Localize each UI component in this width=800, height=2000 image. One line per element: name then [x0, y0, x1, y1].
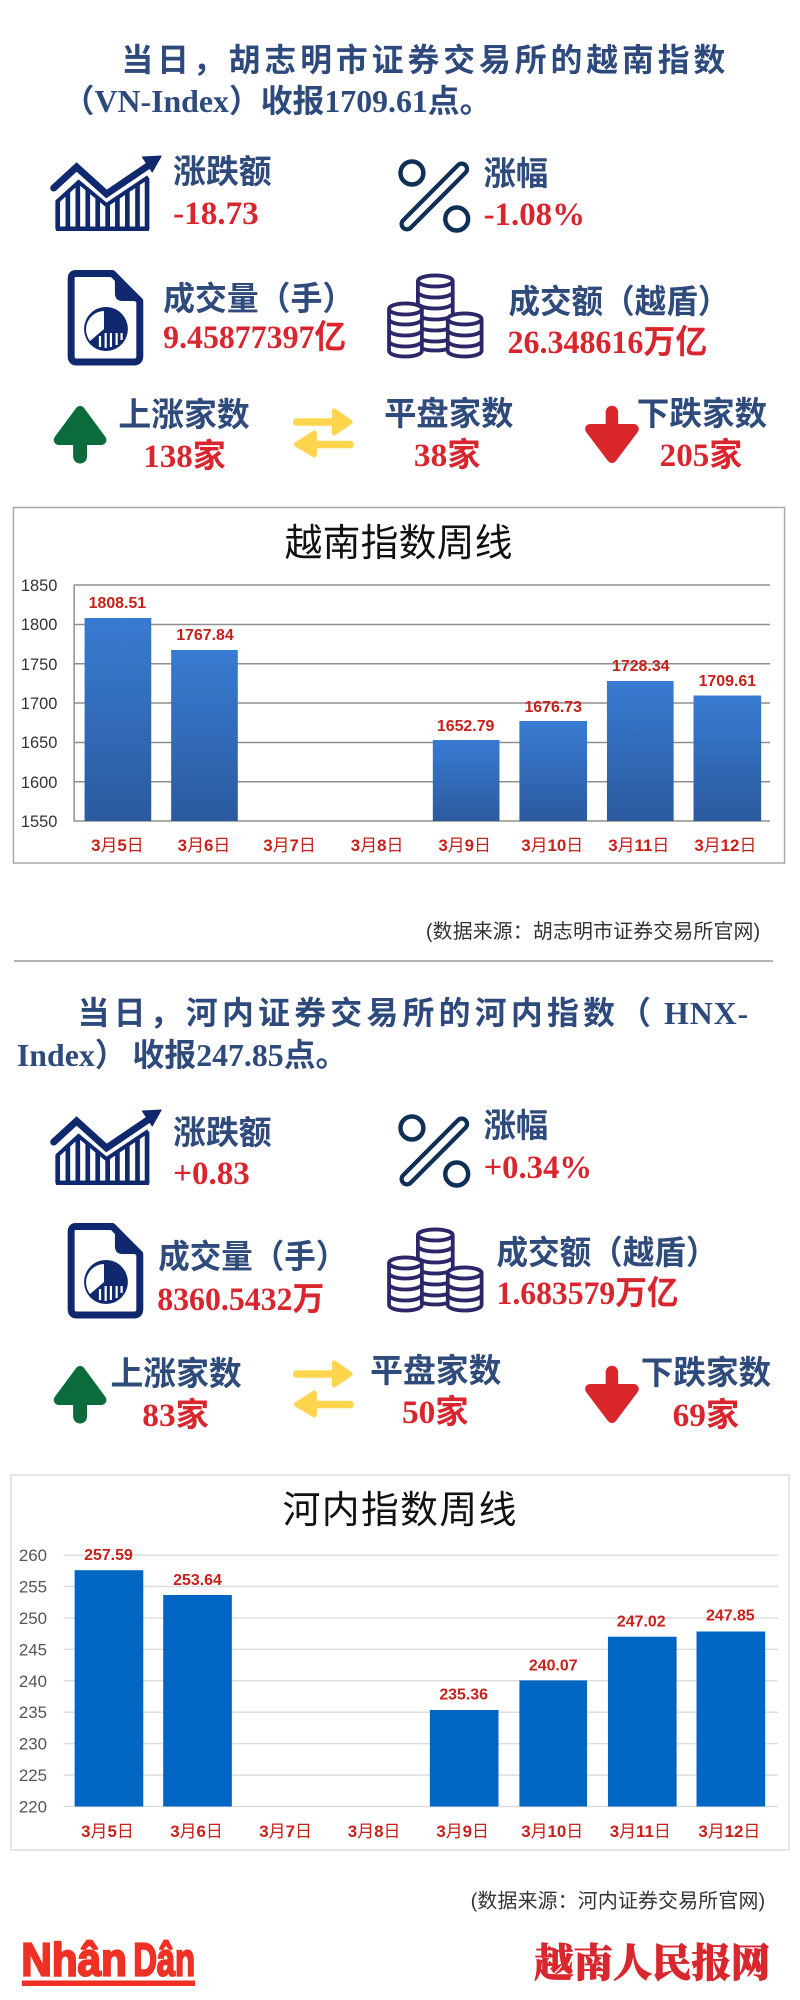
section 2: HNX-Index summary [17, 996, 771, 1434]
y axis labels: 1750 [21, 656, 57, 674]
stat: change percent [484, 1107, 592, 1186]
icon: red down arrow [590, 412, 634, 458]
stat: volume: 9.45877397亿 [163, 319, 346, 356]
stat: turnover: 成交额（越盾） [508, 283, 729, 320]
title: VN-Index close: 当日，胡志明市证券交易所的越南指数 [121, 43, 725, 78]
y axis labels: 255 [19, 1577, 47, 1597]
x axis date labels: 3月9日 [438, 836, 491, 855]
stat: advancers: 上涨家数 [110, 1355, 242, 1392]
y axis labels: 1850 [21, 577, 57, 595]
icon: coin stacks [389, 1230, 482, 1310]
x axis date labels: 3月5日 [91, 836, 144, 855]
bar value labels: 1808.51 [89, 595, 146, 612]
stat: volume [163, 280, 354, 356]
icon: green up arrow [59, 1371, 101, 1416]
x axis date labels: 3月6日 [170, 1822, 223, 1841]
stat: turnover: 1.683579万亿 [497, 1275, 679, 1312]
stat: turnover: 26.348616万亿 [507, 324, 707, 361]
source note 2: (数据来源：河内证券交易所官网) [471, 1889, 765, 1913]
y axis labels: 260 [19, 1546, 47, 1565]
icon: green up arrow [59, 411, 101, 456]
bar value labels: 247.85 [706, 1607, 755, 1624]
y axis labels: 1650 [21, 734, 57, 752]
y axis labels: 1550 [21, 813, 57, 831]
bar value labels: 235.36 [439, 1687, 488, 1704]
icon: percent [400, 162, 468, 230]
x axis date labels: 3月12日 [698, 1822, 760, 1841]
section 1: VN-Index summary [54, 43, 767, 475]
stat: decliners [641, 1354, 771, 1434]
y axis labels: 245 [19, 1640, 47, 1659]
stat: decliners: 205家 [660, 437, 742, 474]
logo: Nhan Dan [21, 1933, 195, 1986]
y axis labels: 235 [19, 1703, 47, 1722]
y axis labels: 1800 [21, 616, 57, 634]
stat: unchanged: 50家 [402, 1394, 469, 1431]
icon: percent [400, 1116, 468, 1186]
icon: yellow flat arrows [297, 411, 350, 455]
x axis date labels: 3月10日 [521, 836, 583, 855]
stat: change percent: 涨幅 [484, 155, 548, 192]
stat: change amount: 涨跌额 [173, 153, 272, 190]
stat: decliners: 下跌家数 [637, 395, 767, 432]
stat: advancers: 上涨家数 [118, 396, 250, 433]
stat: change amount [173, 1114, 272, 1192]
y axis labels: 250 [19, 1609, 47, 1628]
bar value labels: 257.59 [84, 1547, 133, 1564]
stat: change percent [484, 155, 585, 233]
stat: advancers: 138家 [143, 438, 226, 475]
y axis labels [21, 577, 57, 831]
bar value labels: 1728.34 [612, 658, 670, 675]
stat: volume: 成交量（手） [158, 1238, 347, 1275]
stat: change percent: -1.08% [484, 197, 585, 233]
x axis date labels [81, 1822, 760, 1841]
stat: advancers [118, 396, 250, 475]
x axis date labels: 3月8日 [351, 836, 403, 855]
stat: unchanged: 38家 [414, 437, 481, 474]
stat: unchanged [384, 395, 513, 474]
stat: decliners: 69家 [673, 1397, 739, 1434]
stat: advancers: 83家 [142, 1397, 209, 1434]
y axis labels: 230 [19, 1735, 47, 1754]
x axis date labels: 3月11日 [608, 836, 669, 855]
stat: change amount [173, 153, 272, 232]
bar value labels [89, 595, 756, 735]
y axis labels: 225 [19, 1766, 47, 1785]
icon: red down arrow [590, 1372, 634, 1418]
bar value labels: 1709.61 [699, 673, 756, 690]
stat: volume: 8360.5432万 [157, 1282, 324, 1318]
title: HNX-Index close: 当日，河内证券交易所的河内指数（ HNX- [78, 996, 749, 1031]
stat: advancers [110, 1355, 242, 1434]
icon: document with pie chart [71, 271, 143, 362]
icon: yellow flat arrows [297, 1363, 350, 1415]
panel: HNX-Index weekly chart [11, 1475, 789, 1850]
logo: Nhan Dan: Dân [133, 1933, 195, 1986]
stat: decliners [637, 395, 767, 474]
bar value labels: 253.64 [173, 1572, 222, 1589]
source note 1: (数据来源：胡志明市证券交易所官网) [426, 920, 760, 943]
bar value labels [84, 1547, 755, 1704]
y axis labels: 220 [19, 1797, 47, 1817]
stat: change amount: 涨跌额 [173, 1114, 272, 1151]
stat: change amount: +0.83 [173, 1156, 250, 1192]
stat: volume: 成交量（手） [163, 280, 354, 317]
brand name in Chinese: 越南人民报网 [534, 1933, 770, 1989]
y axis labels: 1700 [21, 695, 57, 713]
chart title: 河内指数周线 [283, 1490, 516, 1532]
icon: trend chart [54, 1110, 161, 1185]
stat: turnover: 成交额（越盾） [497, 1234, 717, 1271]
stat: turnover [497, 1234, 717, 1312]
x axis date labels: 3月6日 [178, 836, 230, 855]
logo: Nhan Dan: Nhân [21, 1933, 127, 1986]
x axis date labels: 3月11日 [610, 1822, 671, 1841]
title: HNX-Index close: Index）收报247.85点。 [17, 1038, 347, 1073]
stat: volume [157, 1238, 347, 1318]
chart title: 越南指数周线 [285, 523, 512, 565]
title: VN-Index close: （VN-Index）收报1709.61点。 [63, 84, 491, 119]
x axis date labels: 3月9日 [436, 1822, 489, 1841]
x axis date labels: 3月7日 [259, 1822, 312, 1841]
stat: decliners: 下跌家数 [641, 1354, 771, 1391]
stat: unchanged: 平盘家数 [370, 1352, 502, 1389]
stat: change percent: +0.34% [484, 1150, 592, 1186]
panel: VN-Index weekly chart [13, 508, 785, 863]
x axis date labels: 3月10日 [521, 1822, 583, 1841]
stat: unchanged [370, 1352, 502, 1431]
bar value labels: 1767.84 [176, 627, 234, 644]
icon: document with pie chart [71, 1224, 143, 1315]
y axis labels [19, 1546, 47, 1817]
icon: trend chart [54, 156, 161, 231]
bar value labels: 1652.79 [437, 718, 495, 735]
stat: turnover [507, 283, 729, 361]
y axis labels: 240 [19, 1672, 47, 1691]
y axis labels: 1600 [21, 774, 57, 792]
stat: change percent: 涨幅 [484, 1107, 548, 1144]
title: HNX-Index close [17, 996, 749, 1073]
bars [85, 618, 761, 821]
x axis date labels: 3月7日 [263, 836, 316, 855]
x axis date labels: 3月5日 [81, 1822, 134, 1841]
x axis date labels: 3月8日 [348, 1822, 400, 1841]
stat: unchanged: 平盘家数 [384, 395, 513, 432]
stat: change amount: -18.73 [173, 196, 259, 232]
bar value labels: 1676.73 [524, 699, 582, 716]
icon: coin stacks [389, 276, 482, 356]
title: VN-Index close [63, 43, 725, 119]
x axis date labels: 3月12日 [694, 836, 756, 855]
x axis date labels [91, 836, 756, 855]
bars [75, 1570, 765, 1806]
bar value labels: 240.07 [529, 1657, 578, 1674]
bar value labels: 247.02 [617, 1613, 666, 1630]
